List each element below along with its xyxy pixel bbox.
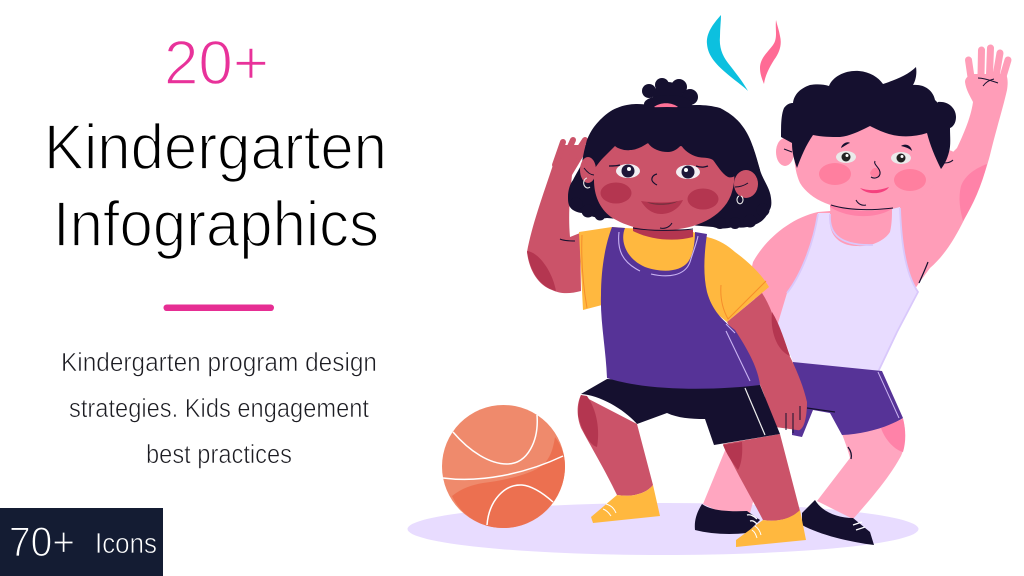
accent bar bbox=[164, 304, 274, 311]
girl left shoe bbox=[591, 485, 660, 523]
girl earrings bbox=[584, 178, 743, 204]
girl right shoe bbox=[736, 510, 806, 547]
illustration: girl bbox=[527, 78, 807, 547]
heading: 20+: 20+ bbox=[164, 29, 269, 98]
badge: 70+ Icons: 70+ bbox=[9, 518, 75, 565]
boy left shoe bbox=[695, 504, 760, 534]
girl eyes bbox=[609, 164, 708, 179]
title: Kindergarten Infographics: Infographics bbox=[53, 188, 379, 260]
girl shorts bbox=[581, 379, 780, 445]
boy mouth bbox=[860, 187, 889, 193]
girl left leg bbox=[578, 395, 653, 496]
ground shadow bbox=[408, 503, 918, 555]
hand lines bbox=[978, 78, 998, 86]
girl fingers bbox=[555, 140, 585, 165]
illustration: basketball bbox=[442, 405, 565, 528]
illustration: boy bbox=[695, 48, 1008, 545]
description text: strategies. Kids engagement bbox=[69, 395, 369, 423]
girl cheeks bbox=[600, 182, 632, 204]
girl ears bbox=[580, 157, 596, 183]
girl nose bbox=[652, 174, 657, 185]
girl face bbox=[594, 140, 734, 230]
girl elbow shade bbox=[527, 251, 556, 291]
girl back hair bbox=[568, 104, 771, 229]
girl right leg bbox=[723, 434, 800, 521]
badge: 70+ Icons: Icons bbox=[95, 528, 157, 560]
title: Kindergarten Infographics: Kindergarten bbox=[44, 111, 387, 183]
boy arm shade bbox=[960, 164, 987, 221]
hair tie bbox=[654, 103, 678, 111]
title: Kindergarten Infographics bbox=[44, 111, 387, 260]
girl hanging arm bbox=[727, 293, 807, 430]
boy body and raised arm bbox=[751, 74, 1008, 340]
boy fingers bbox=[968, 48, 1008, 84]
description text: best practices bbox=[146, 441, 292, 469]
girl neck bbox=[633, 227, 693, 240]
boy right shoe bbox=[802, 500, 874, 545]
icon: cyan swoosh bbox=[707, 15, 748, 91]
girl fringe bbox=[582, 107, 760, 177]
boy face bbox=[794, 100, 944, 211]
boy neck bbox=[830, 203, 893, 245]
boy knee shade bbox=[881, 419, 905, 452]
boy hair bbox=[781, 67, 956, 169]
boy back leg bbox=[703, 440, 770, 513]
boy ears bbox=[776, 138, 794, 166]
icon: pink swoosh bbox=[760, 20, 781, 84]
description text: Kindergarten program design bbox=[61, 349, 377, 377]
girl mouth bbox=[641, 200, 683, 214]
girl tank top bbox=[601, 227, 760, 389]
boy eyes bbox=[836, 142, 912, 164]
girl left arm bbox=[527, 145, 590, 293]
boy cheeks bbox=[819, 163, 851, 185]
boy nose bbox=[870, 168, 880, 177]
girl shirt bbox=[579, 227, 769, 322]
girl hair bun bbox=[642, 78, 698, 113]
boy tank top bbox=[778, 207, 918, 372]
boy front leg bbox=[817, 418, 905, 519]
description text bbox=[61, 349, 377, 469]
boy shorts bbox=[792, 362, 903, 437]
badge: 70+ Icons bbox=[0, 508, 163, 576]
